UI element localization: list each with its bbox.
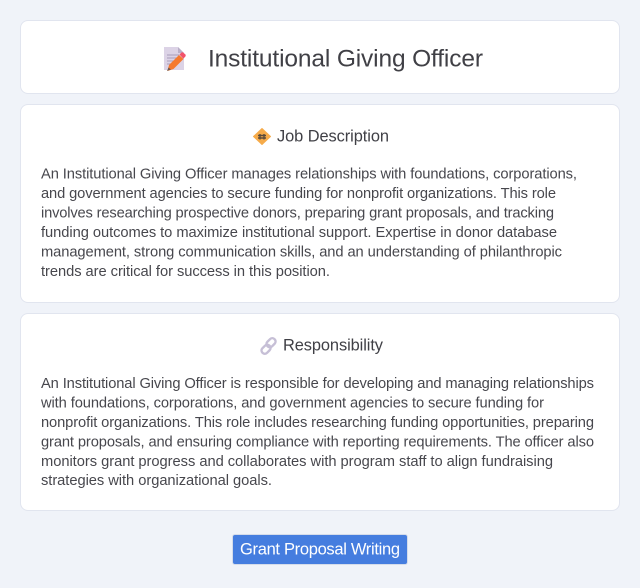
title text: Institutional Giving Officer (208, 46, 483, 72)
icon: chain link (260, 337, 277, 355)
heading: job description: Job Description (277, 128, 389, 146)
panel: title (20, 20, 620, 94)
responsibility text: An Institutional Giving Officer is responsible for developing and managing relationships (41, 376, 594, 392)
panel: responsibility (20, 313, 620, 511)
button: Grant Proposal Writing (232, 534, 408, 565)
responsibility text: monitors grant progress and collaborates with program staff to align fundraising (41, 454, 553, 470)
responsibility text (40, 376, 594, 489)
icon: diamond sign (254, 128, 270, 144)
responsibility text: grant proposals, and ensuring compliance with reporting requirements. The officer also (41, 434, 594, 450)
responsibility text: strategies with organizational goals. (41, 473, 272, 489)
responsibility text: nonprofit organizations. This role includes researching funding opportunities, preparing (41, 415, 594, 431)
job description text: and government agencies to secure funding for nonprofit organizations. This role (41, 186, 556, 202)
job description text: involves researching prospective donors, preparing grant proposals, and tracking (41, 206, 554, 222)
job description text: An Institutional Giving Officer manages relationships with foundations, corporations, (41, 166, 577, 182)
job description text: management, strong communication skills, and an understanding of philanthropic (41, 244, 562, 260)
job description text (41, 166, 577, 280)
job description text: trends are critical for success in this position. (41, 264, 330, 280)
panel: job description (20, 104, 620, 303)
icon: document with pencil (164, 47, 186, 71)
button: Grant Proposal Writing: Grant Proposal Writing (240, 540, 400, 558)
heading: responsibility: Responsibility (283, 336, 384, 354)
job description text: funding outcomes to maximize institutional support. Expertise in donor database (41, 225, 557, 241)
responsibility text: with foundations, corporations, and government agencies to secure funding for (40, 396, 544, 412)
